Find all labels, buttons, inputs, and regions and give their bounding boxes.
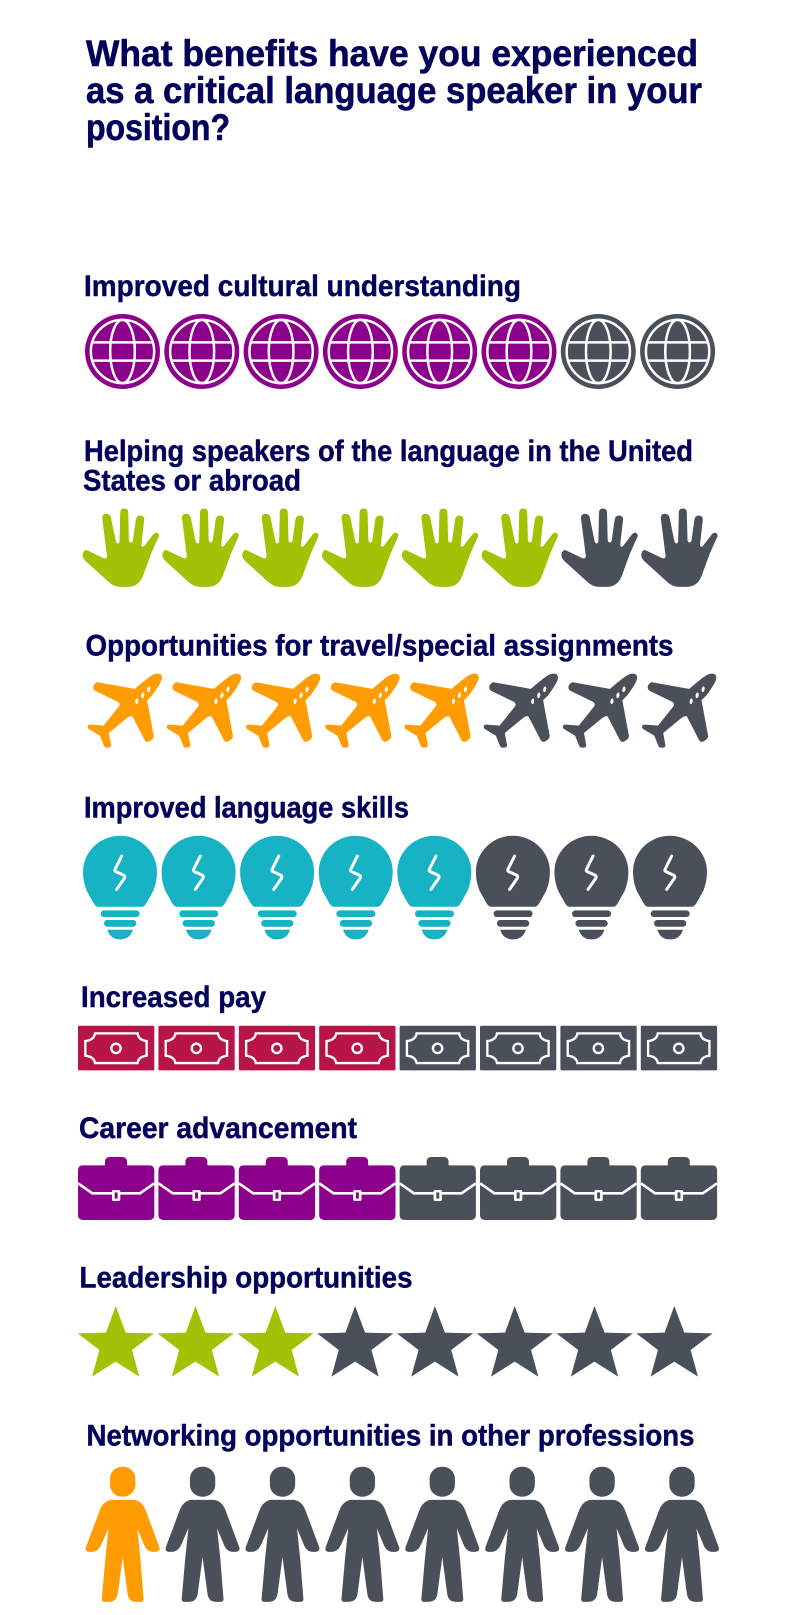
heading: increased pay: Increased pay (81, 981, 266, 1014)
panel: career advancement (78, 1112, 717, 1220)
panel: opportunities for travel (86, 630, 715, 747)
icon row: hands, 6 of 8 highlighted (83, 509, 717, 586)
panel: improved cultural understanding (84, 270, 715, 389)
heading: leadership opportunities: Leadership opportunities (80, 1262, 412, 1294)
panel: networking opportunities (86, 1420, 718, 1601)
icon row: stars, 3 of 8 highlighted (78, 1306, 713, 1377)
heading: improved language skills: Improved language skills (84, 792, 409, 824)
panel: leadership opportunities (78, 1262, 713, 1377)
panel: increased pay (78, 981, 717, 1070)
title: as a critical language speaker in your (86, 70, 702, 111)
heading: opportunities for travel: Opportunities for travel/special assignments (86, 630, 674, 662)
heading: improved cultural understanding: Improved cultural understanding (84, 270, 521, 303)
icon row: banknotes, 4 of 8 highlighted (78, 1026, 717, 1070)
panel: improved language skills (83, 792, 707, 939)
heading: career advancement: Career advancement (79, 1112, 357, 1145)
icon row: planes, 5 of 8 highlighted (89, 675, 715, 747)
heading: helping speakers of the language: States or abroad (83, 464, 301, 498)
heading: helping speakers of the language: Helping speakers of the language in the United (84, 435, 693, 468)
heading: helping speakers of the language (83, 435, 693, 498)
title (86, 33, 702, 148)
icon row: globes, 6 of 8 highlighted (85, 314, 715, 389)
title: position? (86, 107, 230, 148)
icon row: briefcases, 4 of 8 highlighted (78, 1157, 717, 1220)
icon row: people, 1 of 8 highlighted (86, 1467, 718, 1601)
heading: networking opportunities: Networking opportunities in other professions (86, 1420, 694, 1452)
panel: helping speakers of the language (83, 435, 717, 586)
title: What benefits have you experienced (86, 33, 698, 74)
icon row: light bulbs, 5 of 8 highlighted (83, 836, 707, 939)
